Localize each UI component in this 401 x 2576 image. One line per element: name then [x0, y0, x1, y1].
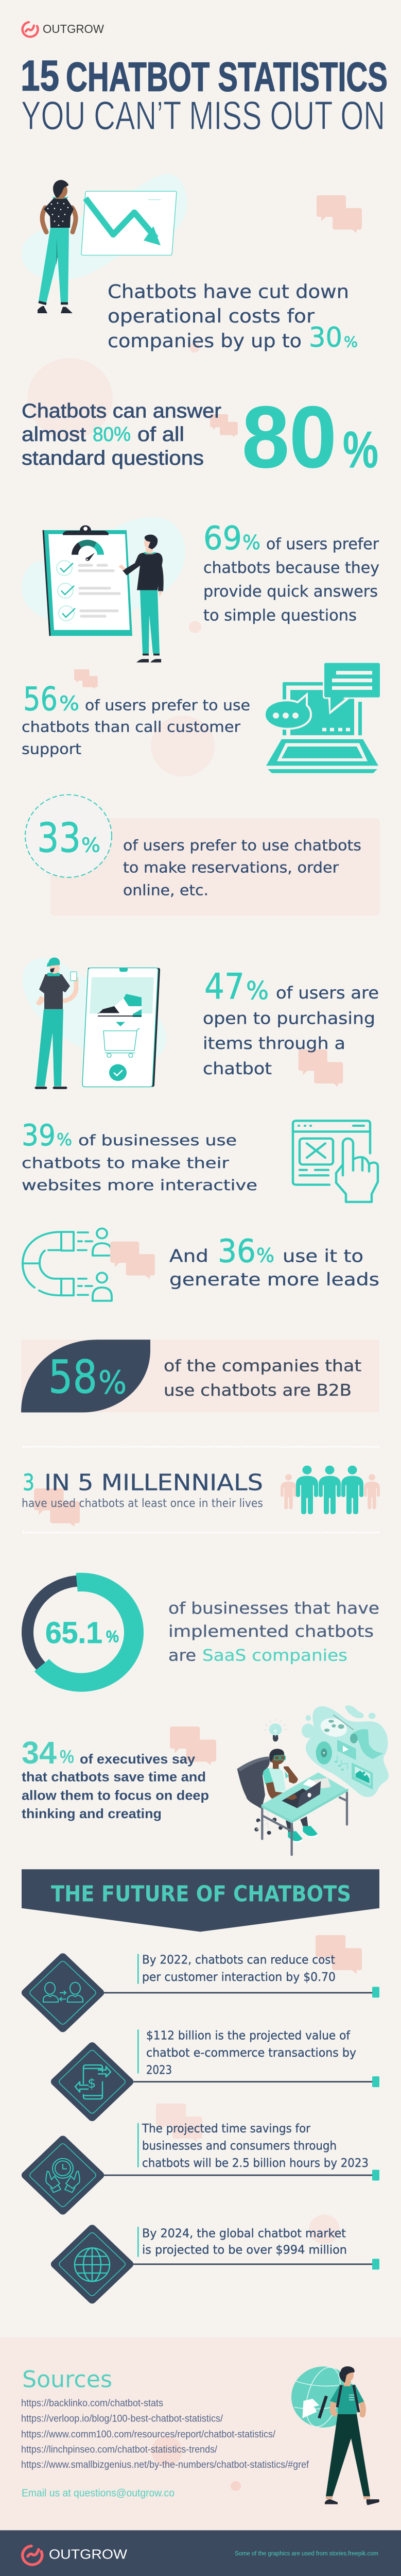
thought cloud [302, 1705, 389, 1797]
illustration: clipboard [43, 525, 132, 636]
big 80 percent figure: % [343, 420, 378, 478]
person [263, 1749, 318, 1843]
text: chatbot e-commerce transactions by [146, 2045, 356, 2060]
pink dots [151, 2436, 241, 2491]
chat bubbles [299, 1049, 343, 1087]
subtext: have used chatbots at least once in their lives [22, 1497, 263, 1510]
heading: IN 5 MILLENNIALS [44, 1469, 263, 1496]
stat text: chatbot [203, 1058, 272, 1078]
stat text: % [344, 334, 358, 351]
stat text: operational costs for [108, 306, 315, 327]
stat text: that chatbots save time and [22, 1769, 206, 1784]
illustration: standing man [38, 180, 76, 313]
connector line [133, 2259, 379, 2269]
stat text: of users prefer [266, 535, 379, 553]
illustration: phone shop [82, 968, 160, 1087]
pale panel [21, 1340, 379, 1413]
accent bar [137, 1954, 139, 1984]
connector line [103, 2170, 379, 2181]
chat bubbles [210, 414, 238, 437]
header logo [23, 22, 104, 37]
source links: https://backlinko.com/chatbot-stats [21, 2398, 163, 2409]
text [142, 2122, 369, 2170]
source links: https://verloop.io/blog/100-best-chatbot-statistics/ [21, 2413, 223, 2424]
title line 1: 15 [21, 52, 59, 100]
stat text: of executives say [80, 1752, 195, 1767]
footer credit: Some of the graphics are used from stories.freepik.com [235, 2550, 378, 2557]
icon: browser with pointing hand [293, 1121, 378, 1202]
accent bar [137, 2227, 139, 2257]
text: businesses and consumers through [142, 2139, 337, 2153]
stat text: of users prefer to use chatbots [123, 837, 361, 854]
stat 6: 47 percent [23, 958, 379, 1088]
logo wordmark: OUTGROW [43, 22, 104, 36]
stat 4: 56 percent [22, 662, 381, 776]
dashed circle [25, 795, 112, 877]
text: per customer interaction by $0.70 [142, 1970, 336, 1984]
stat text: standard questions [22, 447, 204, 469]
illustration: globe with cursor and man [291, 2364, 379, 2505]
diamond icon: customers exchanging [20, 1952, 106, 2034]
illustration: man at clipboard [118, 535, 164, 663]
pink dot [189, 621, 201, 633]
text [146, 2028, 356, 2077]
chat bubbles [34, 1488, 80, 1527]
stat 12: 34 percent [22, 1705, 389, 1855]
figure: 58 [48, 1351, 97, 1404]
stat 5: 33 percent [25, 795, 380, 916]
stat 11: 65.1 percent [28, 1573, 379, 1692]
text: By 2024, the global chatbot market [142, 2226, 346, 2240]
stat text [169, 1233, 379, 1290]
stat 2: 80 percent [22, 358, 378, 486]
stat text [123, 837, 361, 899]
stat text: % [246, 977, 269, 1005]
stat text: allow them to focus on deep [22, 1788, 209, 1803]
background blob [23, 958, 166, 1060]
source links [21, 2398, 309, 2470]
diamond icon: hands and clock [20, 2134, 106, 2216]
chat bubbles [156, 2104, 202, 2142]
diamond icon: phone payment: $ [88, 2076, 96, 2091]
icon: magnet attracting people [23, 1228, 112, 1301]
illustration: man with cap [36, 958, 77, 1088]
stat 3: 69 percent [22, 517, 379, 663]
background blob [22, 517, 185, 621]
stat 10: 3 in 5 millennials [22, 1466, 380, 1527]
stat text: to simple questions [203, 606, 357, 624]
pale circle [27, 358, 113, 438]
text: By 2022, chatbots can reduce cost [142, 1953, 335, 1967]
stat text: 30 [309, 321, 342, 353]
stat text: And [169, 1246, 208, 1266]
text: 2023 [146, 2063, 172, 2077]
pink dot [189, 343, 200, 352]
chat bubbles [170, 1726, 216, 1765]
stat 9: 58 percent [21, 1340, 379, 1413]
diamond icon: phone payment [49, 2041, 135, 2123]
stat text: online, etc. [123, 882, 208, 899]
stat text: support [22, 740, 81, 757]
text: $112 billion is the projected value of [146, 2028, 351, 2042]
icon: laptop with speech bubbles [265, 662, 381, 773]
stat text: chatbots than call customer [22, 718, 241, 735]
stat text: provide quick answers [203, 583, 378, 601]
sources heading: Sources [22, 2365, 112, 2393]
stat text: 47 [204, 966, 245, 1007]
timeline item: e-commerce value [49, 2028, 379, 2123]
email line: Email us at questions@outgrow.co [22, 2487, 175, 2499]
stat text [22, 400, 221, 469]
stat 7: 39 percent [22, 1118, 378, 1202]
source links: https://www.smallbizgenius.net/by-the-numbers/chatbot-statistics/#gref [21, 2459, 309, 2470]
stat text: of users prefer to use [85, 697, 250, 714]
stat text [203, 966, 379, 1078]
icon row: people [281, 1466, 380, 1514]
stat text: 39 [22, 1118, 56, 1153]
big 80 percent figure: 80 [242, 388, 337, 486]
accent bar [137, 2029, 139, 2073]
chat bubbles [316, 1935, 362, 1974]
stat text: of businesses use [78, 1132, 237, 1149]
stat text: of businesses that have [168, 1599, 379, 1618]
donut figure: 65.1 [45, 1616, 102, 1650]
diamond icon: globe [49, 2223, 135, 2305]
heading: 3 [23, 1469, 34, 1496]
stat text: companies by up to [108, 330, 302, 352]
stat text: 80% [93, 423, 131, 446]
desk with laptop [261, 1772, 348, 1855]
illustration: creative person at desk [237, 1705, 389, 1855]
stat text: are [168, 1646, 196, 1665]
text [142, 2226, 347, 2257]
timeline item: time savings [20, 2104, 379, 2216]
stat text [22, 1735, 209, 1821]
stat text: use it to [283, 1246, 363, 1266]
banner text: THE FUTURE OF CHATBOTS [51, 1881, 351, 1907]
stat text [168, 1599, 379, 1665]
stat text: 56 [23, 681, 58, 718]
dark leaf shape [21, 1340, 150, 1413]
source links: https://linchpinseo.com/chatbot-statistics-trends/ [21, 2444, 218, 2455]
stat text: to make reservations, order [123, 859, 339, 876]
footer background [0, 2530, 401, 2576]
section heading: the future of chatbots [22, 1869, 379, 1932]
footer logo mark [23, 2546, 42, 2565]
stat text: chatbots because they [203, 559, 379, 577]
panel background [0, 2337, 401, 2530]
connector line [103, 1987, 379, 1997]
stat text [203, 520, 379, 624]
chat bubbles [74, 669, 98, 689]
logo mark [23, 22, 38, 37]
timeline item: 2022 cost reduction [20, 1935, 379, 2034]
pale circle [309, 2214, 340, 2244]
panel: sources [0, 2337, 401, 2530]
stat text [164, 1356, 361, 1400]
text [142, 1953, 336, 1984]
stat text: 36 [218, 1233, 256, 1269]
accent bar [137, 2123, 139, 2167]
stat text [108, 281, 358, 353]
stat text: Chatbots have cut down [108, 281, 349, 302]
stat 1: operational costs [22, 174, 362, 353]
donut chart [28, 1573, 144, 1692]
figure: % [98, 1364, 127, 1401]
stat text: of the companies that [164, 1356, 361, 1375]
stat text [22, 681, 250, 757]
background blob [22, 174, 187, 280]
stat text: % [57, 1130, 72, 1149]
footer [0, 2530, 401, 2576]
stat text: 34 [22, 1735, 57, 1771]
timeline item: global market [49, 2214, 379, 2305]
stat text: open to purchasing [203, 1008, 375, 1028]
illustration: falling chart board [81, 191, 177, 255]
lightbulb [264, 1719, 287, 1741]
stat text: % [59, 692, 79, 715]
banner [22, 1869, 379, 1932]
connector line [133, 2076, 379, 2087]
stat text: use chatbots are B2B [164, 1381, 352, 1400]
stat text: almost [22, 423, 86, 446]
chat bubbles [110, 1242, 155, 1279]
stat text: chatbots to make their [22, 1155, 230, 1172]
stat text: of users are [276, 982, 379, 1003]
stat text: 69 [203, 520, 242, 557]
stat text: SaaS companies [202, 1646, 347, 1665]
stat text: % [256, 1244, 274, 1266]
stat text: Chatbots can answer [22, 400, 221, 422]
stat text: items through a [203, 1033, 345, 1053]
title [21, 52, 388, 138]
stat text: generate more leads [169, 1270, 379, 1290]
source links: https://www.comm100.com/resources/report/chatbot-statistics/ [21, 2429, 276, 2440]
stat text: implemented chatbots [168, 1621, 374, 1641]
chat bubbles [317, 195, 362, 233]
stat 8: 36 percent [23, 1228, 379, 1301]
stat text: thinking and creating [22, 1806, 162, 1821]
footer wordmark: OUTGROW [49, 2547, 127, 2562]
figure: % [81, 834, 100, 857]
stat text: of all [137, 423, 184, 446]
figure: 33 [37, 815, 81, 861]
stat text: % [60, 1746, 74, 1767]
stat text [22, 1118, 257, 1194]
chair [237, 1756, 283, 1835]
stat text: websites more interactive [22, 1177, 257, 1194]
text: chatbots will be 2.5 billion hours by 2023 [142, 2156, 369, 2170]
pale circle [151, 716, 215, 776]
text: is projected to be over $994 million [142, 2243, 347, 2257]
donut figure: % [106, 1628, 119, 1646]
text: The projected time savings for [142, 2122, 310, 2136]
pale panel [50, 818, 380, 916]
stat text: % [242, 532, 260, 554]
